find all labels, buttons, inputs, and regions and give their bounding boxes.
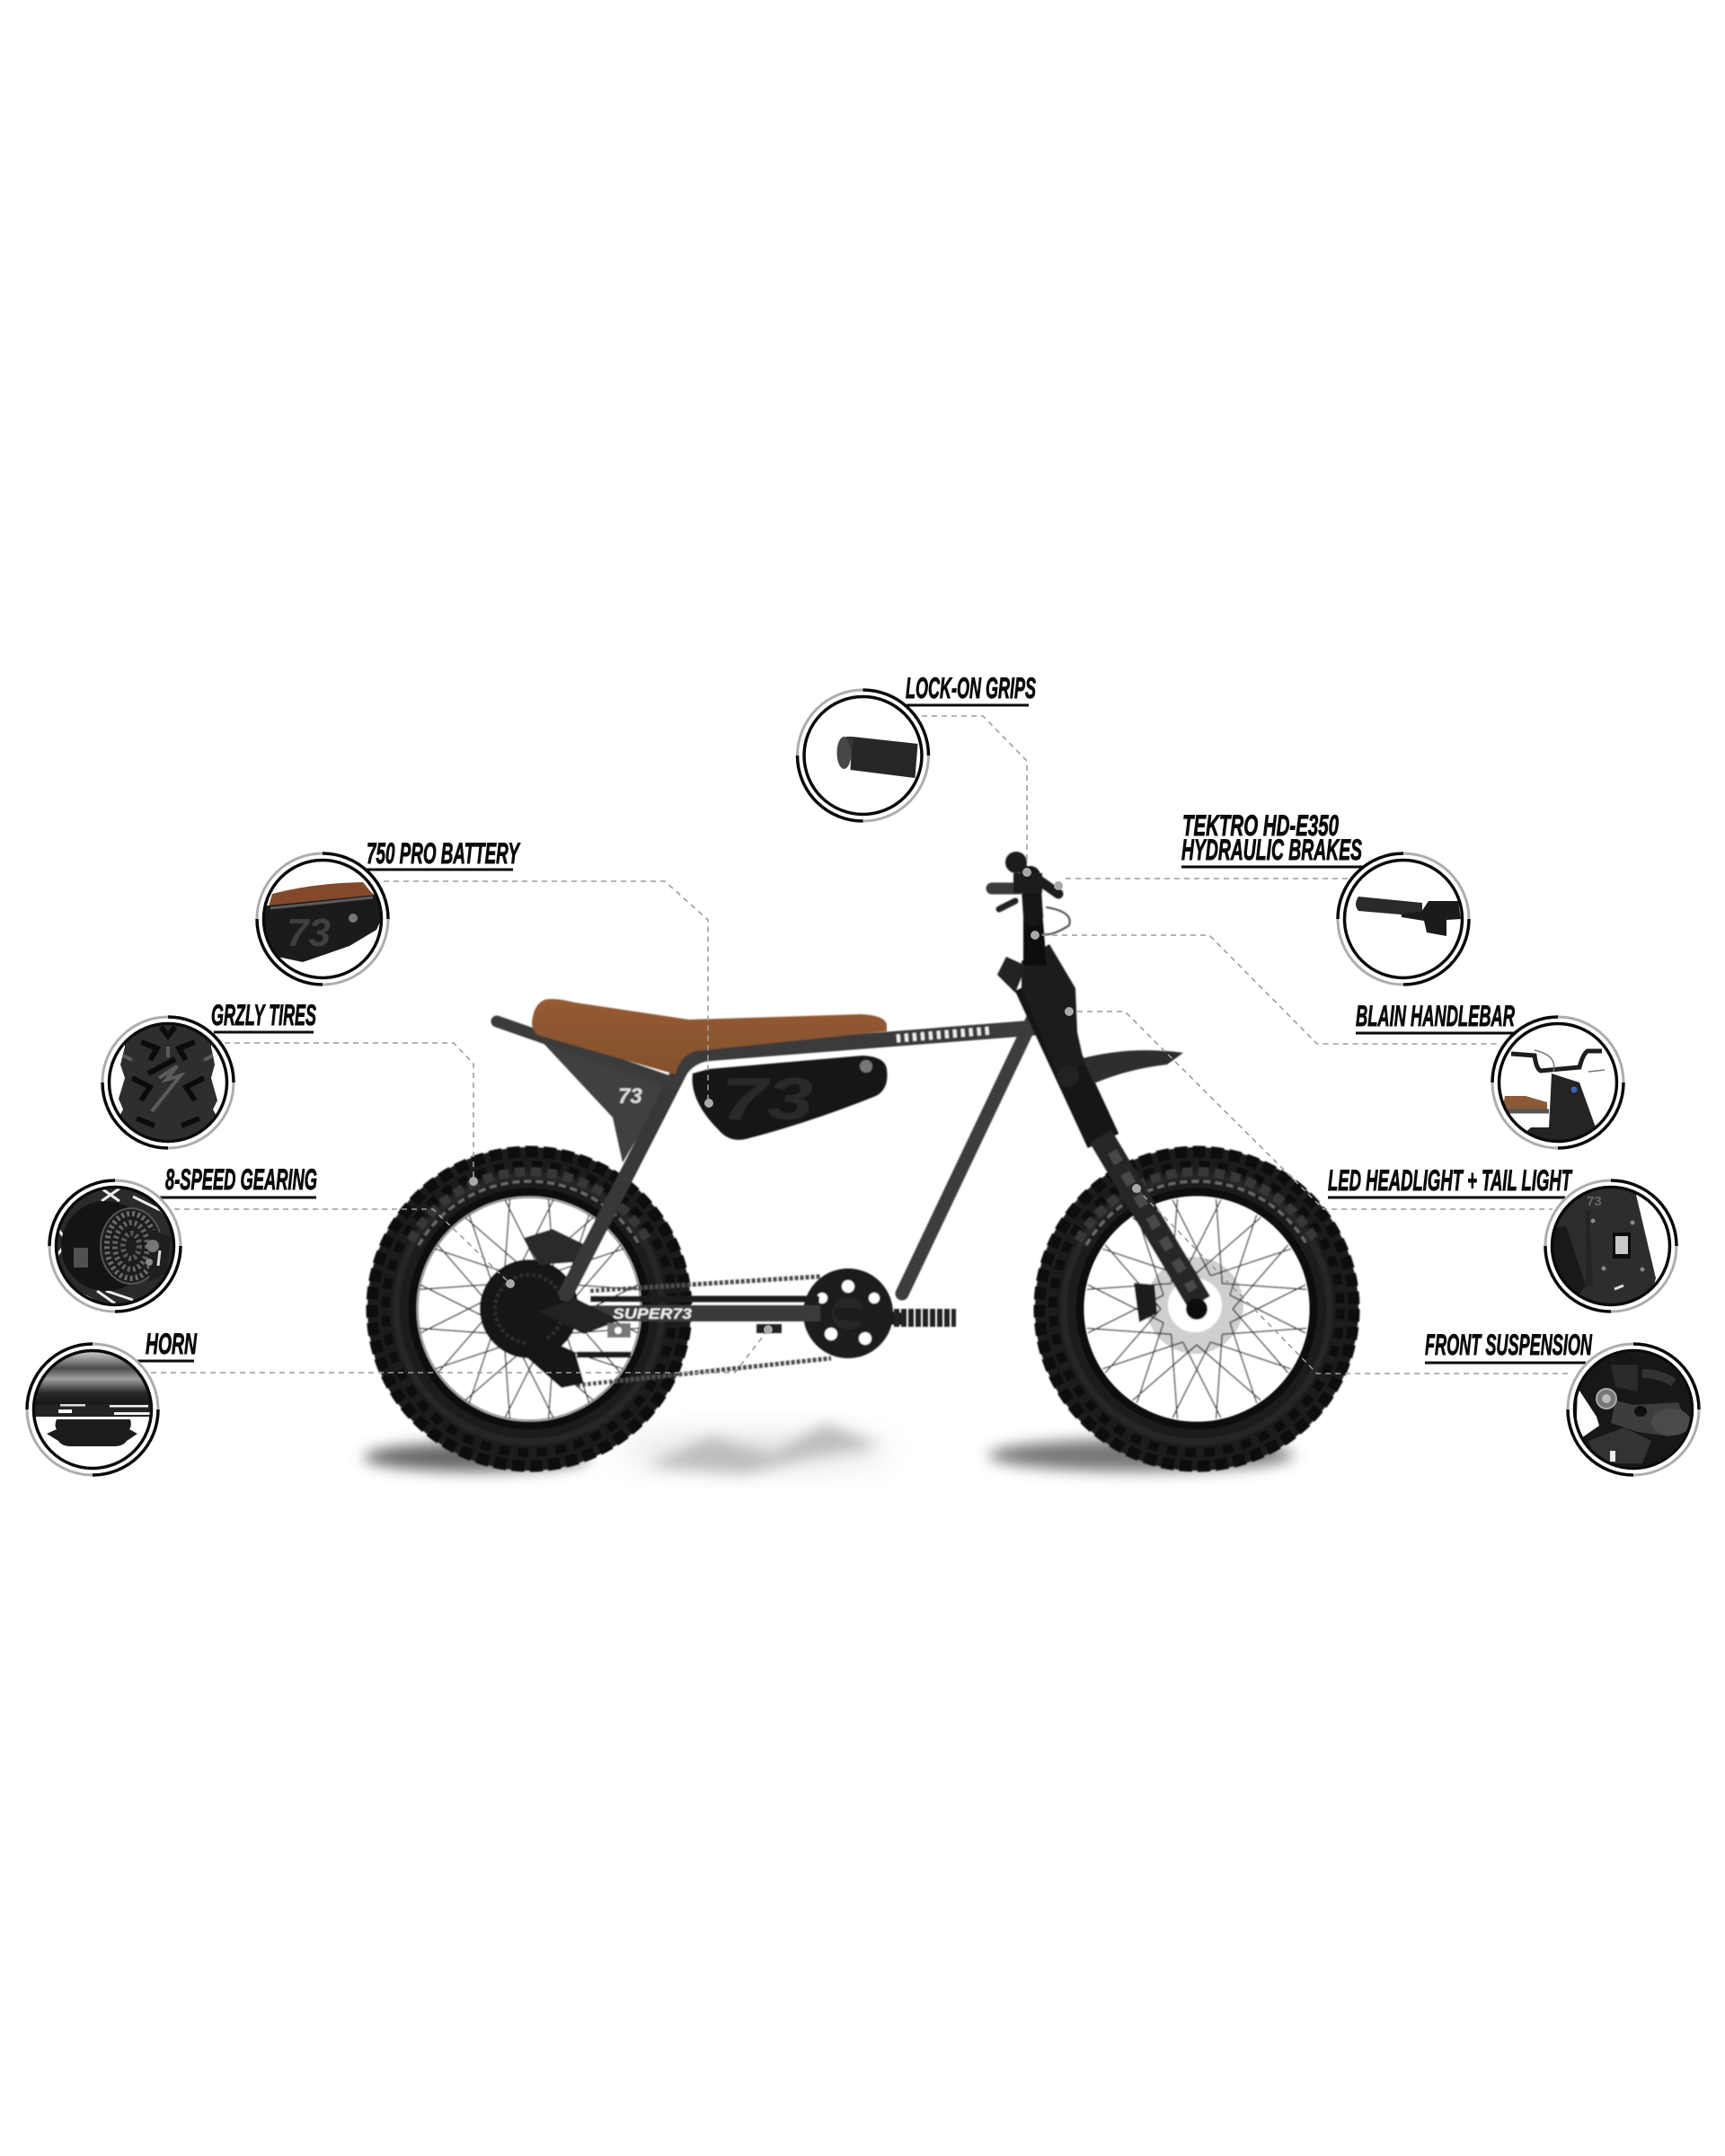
seat <box>532 999 887 1074</box>
underline <box>1328 1197 1565 1198</box>
underline <box>160 1197 316 1198</box>
callout: horn <box>27 1325 773 1475</box>
icon: battery close-up: 73 <box>287 911 331 955</box>
icon: tire tread <box>102 1017 234 1148</box>
icon: headlight: 73 <box>1587 1194 1602 1209</box>
leader line <box>1066 878 1348 879</box>
callout: front suspension <box>1132 1184 1699 1475</box>
label: TEKTRO HD-E350 <box>1182 809 1339 842</box>
frame <box>497 1018 1047 1334</box>
label: 8-SPEED GEARING <box>165 1163 317 1196</box>
icon: horn <box>27 1344 158 1475</box>
battery <box>693 1056 888 1140</box>
rear hub and derailleur <box>480 1229 631 1388</box>
frame decals: SUPER73 <box>613 1305 693 1322</box>
icon: headlight <box>1545 1180 1676 1312</box>
rear wheel <box>372 1152 686 1466</box>
icon: grip <box>798 690 929 821</box>
callout: 8-speed gearing <box>49 1163 515 1312</box>
handlebar <box>992 852 1070 966</box>
leader line <box>1137 1188 1570 1374</box>
underline <box>137 1360 194 1362</box>
label: 750 PRO BATTERY <box>367 837 521 870</box>
underline <box>907 704 1029 706</box>
callout: tektro hydraulic brakes <box>1054 809 1469 985</box>
frame decals: 73 <box>618 1084 642 1109</box>
icon: cassette <box>49 1180 181 1312</box>
underline <box>1356 1031 1514 1035</box>
leader line <box>151 1330 768 1373</box>
chainring and crank <box>803 1268 956 1358</box>
leader line <box>1077 1012 1552 1209</box>
leader line <box>922 716 1027 864</box>
battery: 73 <box>721 1065 813 1132</box>
icon: suspension close-up <box>1568 1344 1699 1475</box>
underline <box>1181 866 1363 868</box>
callout: blain handlebar <box>1031 931 1623 1148</box>
label: FRONT SUSPENSION <box>1425 1329 1593 1361</box>
icon: battery close-up <box>257 853 388 985</box>
label: BLAIN HANDLEBAR <box>1356 1000 1515 1032</box>
callout: tektro hydraulic brakes: HYDRAULIC BRAKES <box>1181 834 1362 866</box>
label: LOCK-ON GRIPS <box>906 672 1036 704</box>
label: GRZLY TIRES <box>211 999 316 1031</box>
leader line <box>174 1209 510 1284</box>
callout: led headlight and tail light <box>1065 1007 1676 1312</box>
bike ground shadow <box>364 1424 1294 1473</box>
callout: lock-on grips <box>798 672 1036 877</box>
leader line <box>1042 935 1500 1044</box>
e-bike illustration <box>372 852 1354 1466</box>
icon: brake lever <box>1338 853 1469 985</box>
leader line <box>225 1043 473 1181</box>
label: HORN <box>146 1328 198 1360</box>
callout: 750 pro battery <box>257 837 713 1108</box>
underline <box>367 868 513 871</box>
callout: grzly tires <box>102 999 478 1186</box>
front fork and head <box>997 944 1208 1322</box>
leader line <box>384 881 708 1103</box>
underline <box>214 1031 314 1033</box>
frame decals <box>607 1084 782 1338</box>
underline <box>1425 1362 1586 1364</box>
front wheel <box>1039 1152 1354 1466</box>
drive chain <box>577 1277 831 1385</box>
icon: handlebar <box>1492 1017 1623 1148</box>
